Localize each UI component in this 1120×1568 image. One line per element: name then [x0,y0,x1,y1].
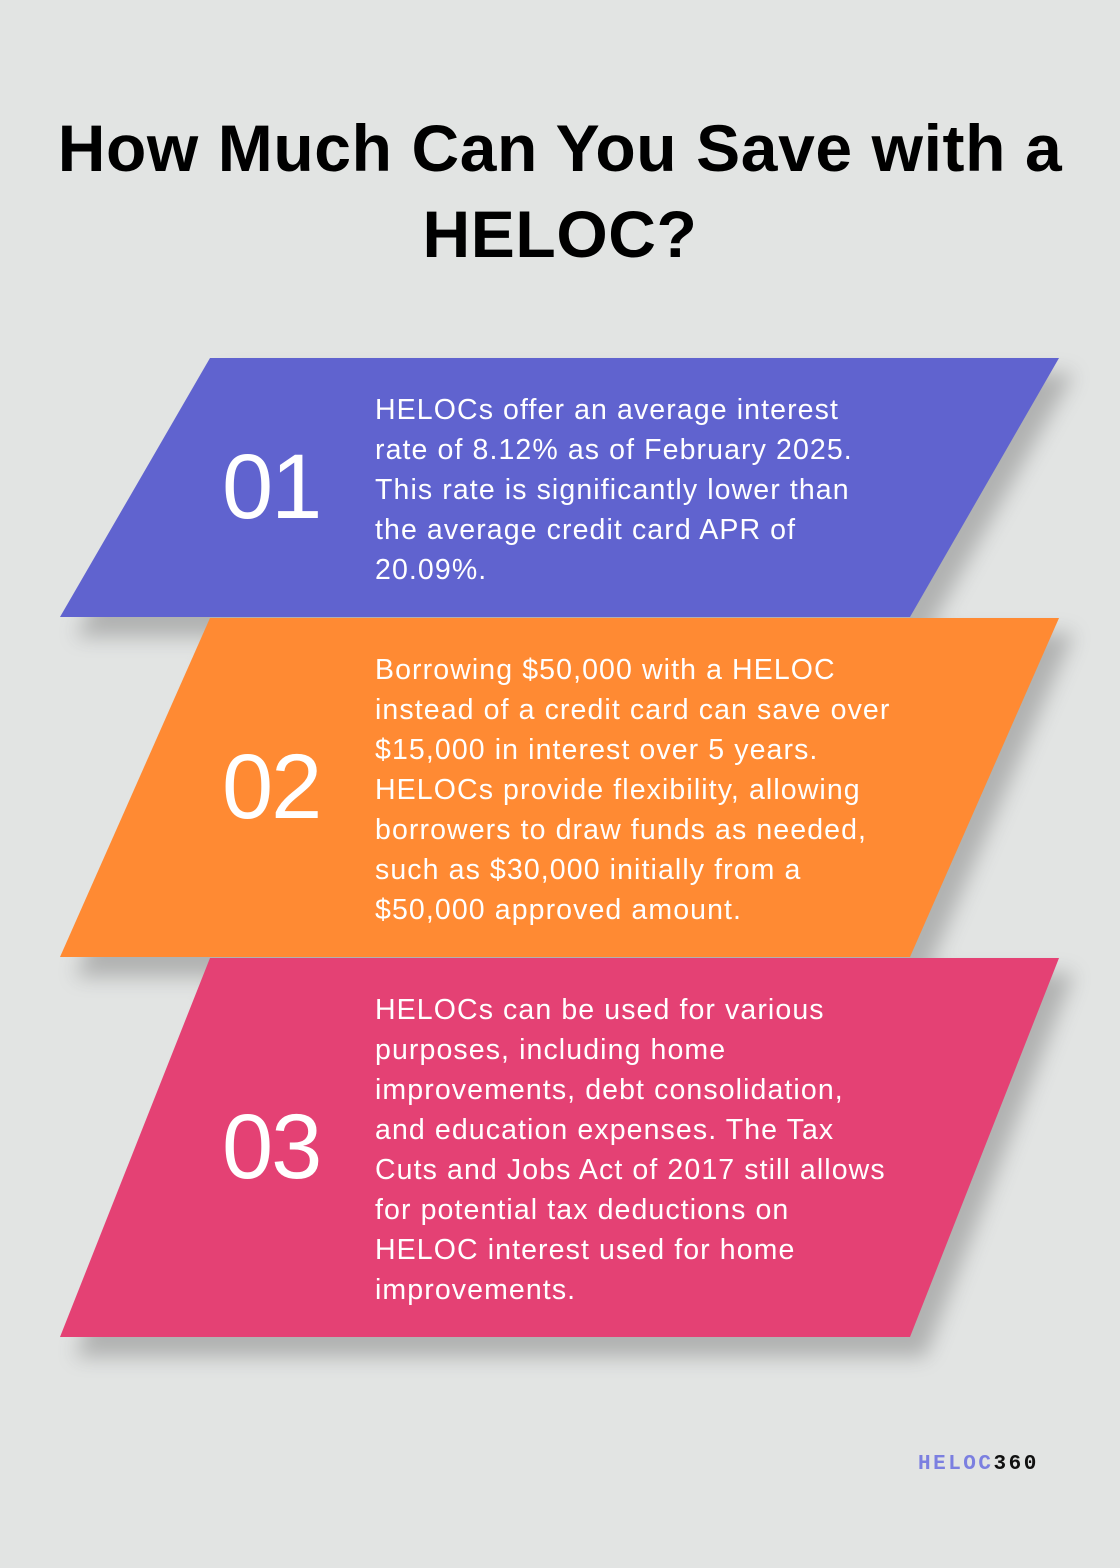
panel 2 number: 02 [222,736,320,838]
panel 2 text: such as $30,000 initially from a [375,854,802,886]
panel 3 text [375,994,886,1306]
logo: HELOC360 [918,1453,1039,1476]
panel 2 text: HELOCs provide flexibility, allowing [375,774,861,806]
panel 3 text: Cuts and Jobs Act of 2017 still allows [375,1154,886,1186]
panel 2 background [60,618,1059,957]
panel 3 text: improvements. [375,1274,576,1306]
panel 3 text: purposes, including home [375,1034,726,1066]
panel 2 text: $15,000 in interest over 5 years. [375,734,818,766]
panel 3 text: improvements, debt consolidation, [375,1074,844,1106]
panel 3 text: for potential tax deductions on [375,1194,789,1226]
panel 1 text: the average credit card APR of [375,514,796,546]
panel 1 text: This rate is significantly lower than [375,474,850,506]
panel 3 text: and education expenses. The Tax [375,1114,834,1146]
panel 3 text: HELOCs can be used for various [375,994,825,1026]
panel 1 text [375,394,853,586]
title [58,111,1062,271]
panel 3 background [60,958,1059,1337]
panel 3 text: HELOC interest used for home [375,1234,795,1266]
panel 1 text: 20.09%. [375,554,487,586]
panel 2 text: instead of a credit card can save over [375,694,890,726]
panel 3 number: 03 [222,1096,320,1198]
panel 1 text: rate of 8.12% as of February 2025. [375,434,853,466]
panel 2 text: $50,000 approved amount. [375,894,742,926]
panel 1 text: HELOCs offer an average interest [375,394,839,426]
panel 2 text: borrowers to draw funds as needed, [375,814,867,846]
title: How Much Can You Save with a [58,111,1062,185]
title: HELOC? [423,197,697,271]
panel 2 text [375,654,890,926]
panel 1 background [60,358,1059,617]
panel 2 text: Borrowing $50,000 with a HELOC [375,654,836,686]
panel 1 number: 01 [222,436,320,538]
